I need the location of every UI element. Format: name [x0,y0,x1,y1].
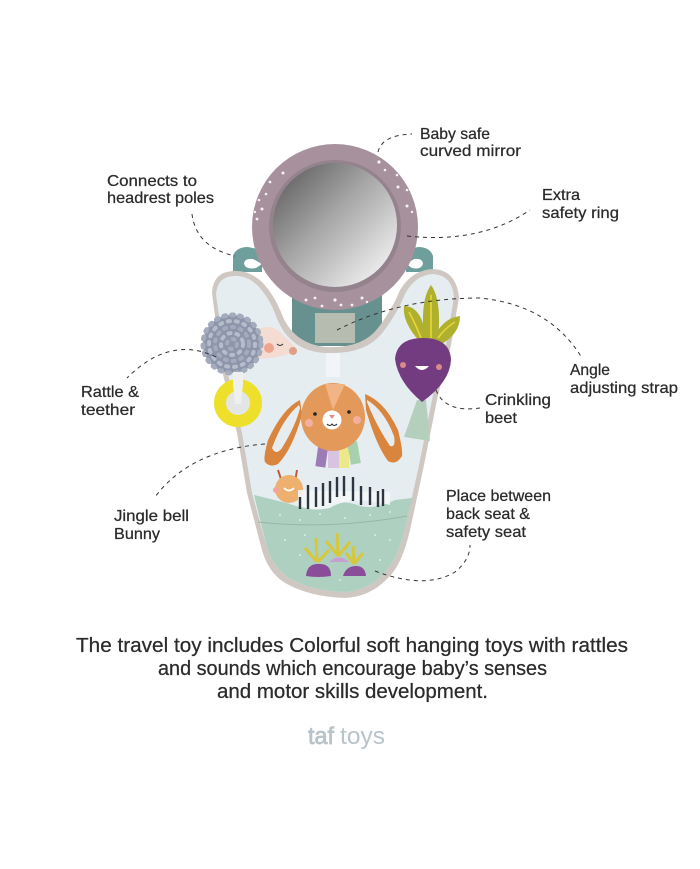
baby safe line [378,134,412,152]
hanging strap [326,353,340,377]
label: beet [485,392,551,427]
toy product [203,144,460,598]
logo: taf [308,723,334,750]
hedgehog rattle [203,315,297,421]
teether ring [220,385,256,421]
description text: The travel toy includes Colorful soft hanging toys with rattles [76,634,628,657]
label: strap: adjusting strap [570,380,678,397]
label: rattle: teether [81,402,136,419]
logo [308,723,385,750]
label: placement [446,488,551,541]
ring dots [254,160,413,307]
label: bunny [114,508,189,543]
label: mirror: curved mirror [420,143,522,160]
label: safety ring: safety ring [542,205,619,222]
description text: and sounds which encourage baby’s senses [158,657,547,680]
mirror mount clips [233,247,433,346]
adjusting strap [315,313,355,343]
label: placement: Place between [446,488,551,505]
description text [76,634,628,703]
label: mirror [420,126,522,160]
beet stem [404,400,430,441]
label: bunny: Bunny [114,526,160,543]
label: strap [570,362,678,397]
label: headrest [107,173,214,207]
label: rattle: Rattle & [81,384,139,401]
label: beet: beet [485,410,518,427]
mirror [273,163,397,287]
mirror ring [252,144,418,310]
label: safety ring: Extra [542,187,580,204]
label: placement: safety seat [446,524,527,541]
label: beet: Crinkling [485,392,551,409]
fabric body [212,269,459,598]
green lower panel [254,495,412,592]
label: mirror: Baby safe [420,126,490,143]
bunny toy [264,383,402,468]
connector lines [127,134,582,581]
label: safety ring [542,187,619,222]
beets print [306,564,331,577]
label: rattle [81,384,139,419]
description text: and motor skills development. [217,680,488,703]
label: placement: back seat & [446,506,530,523]
label: headrest: headrest poles [107,190,214,207]
label: strap: Angle [570,362,610,379]
callout labels [81,126,678,543]
logo: toys [340,723,385,750]
beet toy [395,285,460,441]
label: headrest: Connects to [107,173,197,190]
label: bunny: Jingle bell [114,508,189,525]
fabric prints [273,470,390,577]
